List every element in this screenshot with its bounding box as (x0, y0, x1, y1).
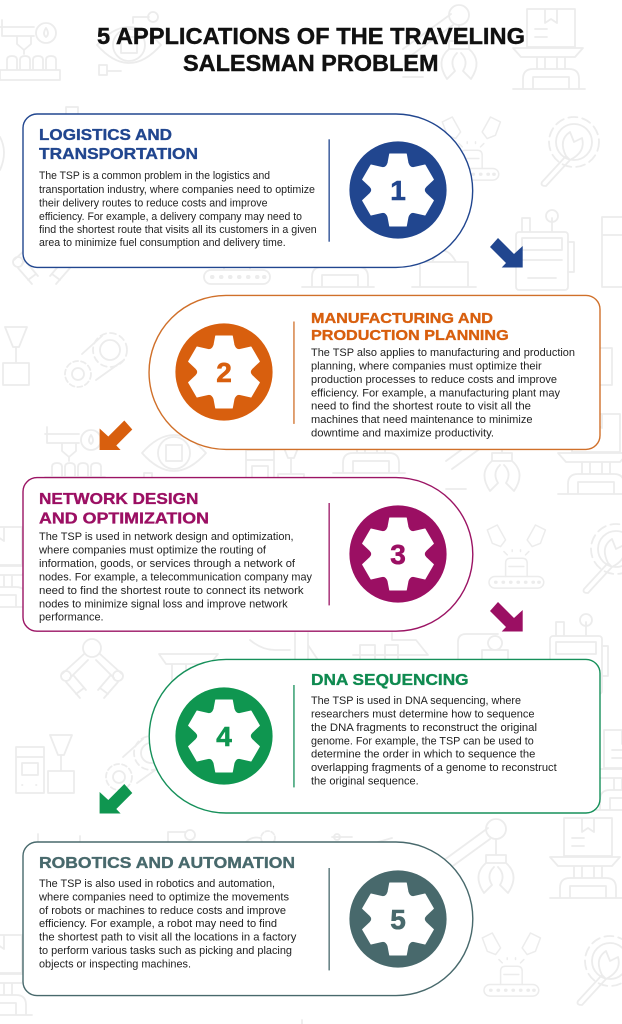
body text: machines that need maintenance to minimize (311, 414, 532, 426)
icon: numbered gear 4 (175, 687, 273, 785)
body text: efficiency. For example, a delivery company may need to (39, 211, 302, 223)
body text: planning, where companies must optimize their (311, 360, 542, 372)
icon: numbered gear 4: 4 (216, 721, 232, 752)
body text: information, goods, or services through a network of (39, 558, 296, 570)
body text: The TSP also applies to manufacturing and production (311, 347, 575, 359)
heading (39, 127, 198, 163)
body text: overlapping fragments of a genome to reconstruct (311, 762, 558, 774)
body text (39, 170, 317, 249)
panel: logistics and transportation (23, 114, 473, 267)
heading: TRANSPORTATION (39, 146, 198, 163)
icon: numbered gear 1 (349, 141, 447, 239)
body text: determine the order in which to sequence the (311, 748, 535, 760)
body text: genome. For example, the TSP can be used to (311, 736, 534, 748)
body text: where companies must optimize the routing of (38, 544, 267, 556)
body text: performance. (39, 612, 104, 624)
body text: downtime and maximize productivity. (311, 428, 494, 440)
title: SALESMAN PROBLEM (183, 50, 438, 76)
divider (328, 139, 330, 242)
heading: NETWORK DESIGN (39, 491, 198, 508)
body text: researchers must determine how to sequence (311, 708, 534, 720)
body text (38, 531, 312, 624)
body text: The TSP is used in DNA sequencing, where (311, 695, 521, 707)
body text: transportation industry, where companies need to optimize (39, 184, 315, 196)
icon: numbered gear 3 (349, 505, 447, 603)
heading: LOGISTICS AND (39, 127, 172, 144)
body text: their delivery routes to reduce costs and improve (39, 198, 268, 210)
body text: need to find the shortest route to visit all the (311, 400, 531, 412)
body text (311, 347, 575, 440)
title (97, 23, 525, 76)
divider (328, 503, 330, 605)
heading: MANUFACTURING AND (311, 310, 493, 327)
body text: where companies need to optimize the movements (38, 892, 289, 904)
body text: efficiency. For example, a robot may need to find (39, 918, 277, 930)
heading: DNA SEQUENCING (311, 672, 469, 689)
body text: the shortest path to visit all the locations in a factory (39, 932, 297, 944)
divider (293, 685, 295, 787)
body text: area to minimize fuel consumption and delivery time. (39, 237, 286, 249)
icon: numbered gear 5 (349, 870, 447, 968)
arrow: step 1 to 2 (490, 238, 523, 268)
heading: ROBOTICS AND AUTOMATION (39, 855, 295, 872)
arrow: step 4 to 5 (100, 784, 132, 814)
divider (293, 322, 295, 424)
icon: numbered gear 2: 2 (216, 357, 232, 388)
heading: AND OPTIMIZATION (39, 510, 209, 528)
body text: need to find the shortest route to connect its network (39, 585, 304, 597)
body text: nodes to minimize signal loss and improve network (39, 598, 288, 610)
body text (38, 878, 297, 970)
body text: nodes. For example, a telecommunication company may (39, 572, 312, 584)
icon: numbered gear 2 (175, 323, 273, 421)
body text: production processes to reduce costs and improve (311, 374, 557, 386)
heading (311, 310, 509, 344)
body text: The TSP is a common problem in the logistics and (39, 170, 270, 182)
body text: objects or inspecting machines. (39, 958, 191, 970)
divider (328, 868, 330, 970)
icon: numbered gear 5: 5 (390, 904, 406, 935)
body text: the DNA fragments to reconstruct the original (311, 722, 537, 734)
body text: efficiency. For example, a manufacturing plant may (311, 388, 560, 400)
panel: robotics and automation (23, 842, 473, 996)
body text: to perform various tasks such as picking and placing (39, 945, 292, 957)
body text (311, 695, 558, 788)
arrow: step 3 to 4 (490, 602, 523, 632)
heading (39, 491, 209, 528)
panel: manufacturing and production planning (149, 295, 600, 449)
body text: of robots or machines to reduce costs and improve (39, 905, 286, 917)
icon: numbered gear 1: 1 (390, 175, 406, 206)
heading: PRODUCTION PLANNING (311, 327, 509, 344)
title: 5 APPLICATIONS OF THE TRAVELING (97, 23, 525, 49)
panel: dna sequencing (149, 659, 600, 813)
body text: find the shortest route that visits all its customers in a given (39, 224, 317, 236)
body text: The TSP is also used in robotics and automation, (39, 878, 275, 890)
panel: network design and optimization (23, 478, 473, 631)
icon: numbered gear 3: 3 (390, 539, 406, 570)
body text: the original sequence. (311, 776, 419, 788)
body text: The TSP is used in network design and optimization, (39, 531, 294, 543)
arrow: step 2 to 3 (100, 420, 132, 450)
